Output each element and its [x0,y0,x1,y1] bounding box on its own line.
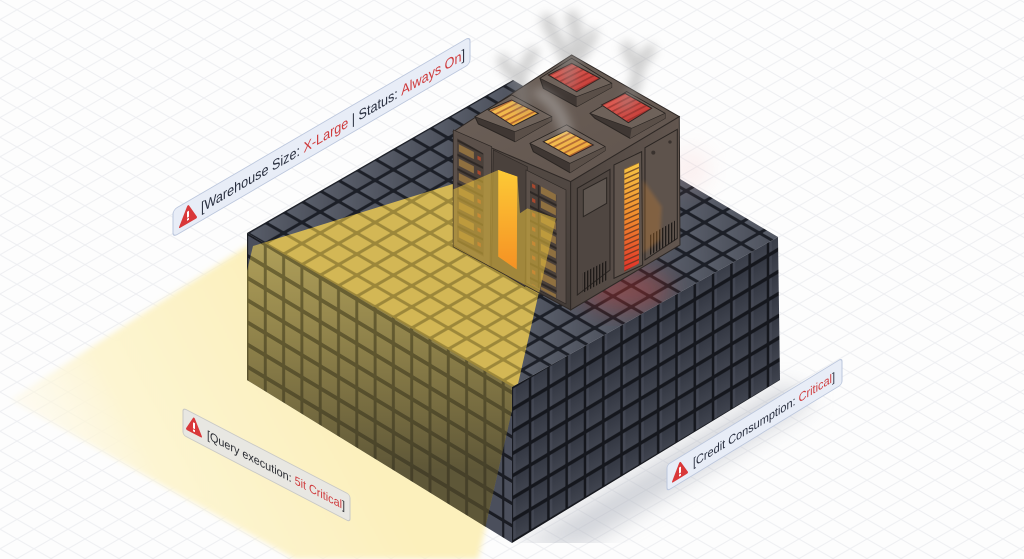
floor shadow of block [512,385,815,550]
amber glow on panel [643,180,662,253]
label: warehouse size [173,37,470,237]
front left panel [577,169,610,295]
isometric cube block [247,80,780,543]
block left face [247,233,512,543]
red heat glow on cubes [580,270,670,310]
warning icon [673,459,687,481]
label text: [Warehouse Size: X-Large | Status: Always On] [201,47,465,216]
door glow [498,170,517,269]
label: credit consumption [667,358,842,491]
block right face [512,237,780,543]
label plate [183,408,350,522]
label text: [Credit Consumption: Critical] [693,370,835,470]
vent right red [590,92,665,138]
front right panel [645,129,677,260]
light beam on floor [10,244,520,559]
label: query execution [183,408,350,522]
vent front yellow [530,125,605,173]
center door [492,150,527,287]
vent bars [582,261,607,293]
server left face [453,132,571,310]
lit top face [264,184,539,387]
red glow behind server [670,148,710,192]
label plate [667,358,842,491]
vent left yellow [475,95,552,142]
smoke plumes [503,17,650,130]
server tower [453,55,680,310]
label text: [Query execution: 5it Critical] [207,427,345,513]
hatch [583,178,607,217]
vent back red [540,58,612,107]
right rack [526,170,566,304]
lit left face shading [247,276,512,527]
lit left face [247,233,512,543]
left rack [453,130,492,267]
warning icon [187,415,201,436]
beam over server [453,170,556,293]
LED column [614,152,643,278]
beam lit cubes [247,184,539,527]
server right face [571,117,680,310]
server top [453,55,679,182]
block top face [247,80,778,387]
label plate [173,37,470,237]
warning icon [180,202,196,227]
